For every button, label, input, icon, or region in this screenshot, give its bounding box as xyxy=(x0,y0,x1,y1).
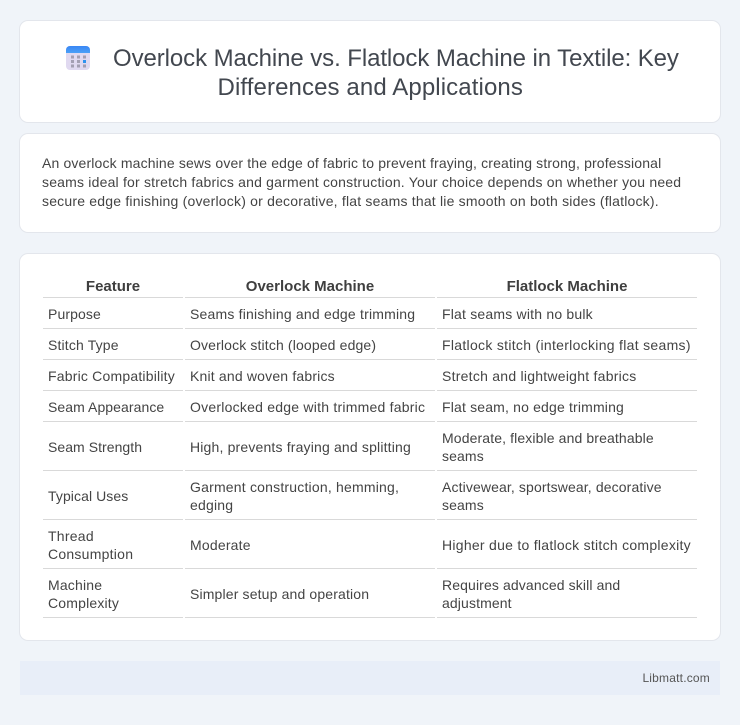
footer text: Libmatt.com xyxy=(642,671,710,685)
comparison table: Seam Strength xyxy=(48,439,142,455)
intro card xyxy=(20,134,720,232)
comparison table: Knit and woven fabrics xyxy=(190,368,335,384)
table card xyxy=(20,254,720,640)
comparison table: Consumption xyxy=(48,546,133,562)
comparison table: seams xyxy=(442,497,484,513)
comparison table: Flat seams with no bulk xyxy=(442,306,593,322)
footer bar xyxy=(20,661,720,695)
title xyxy=(113,45,679,101)
comparison table: Stitch Type xyxy=(48,337,119,353)
title: Differences and Applications xyxy=(218,74,523,101)
comparison table: Activewear, sportswear, decorative xyxy=(442,479,662,495)
comparison table: Simpler setup and operation xyxy=(190,586,369,602)
icon: calendar xyxy=(66,46,90,70)
comparison table: Fabric Compatibility xyxy=(48,368,175,384)
intro text: An overlock machine sews over the edge of fabric to prevent fraying, creating strong, professional xyxy=(42,155,661,171)
comparison table: Higher due to flatlock stitch complexity xyxy=(442,537,691,553)
comparison table: Overlocked edge with trimmed fabric xyxy=(190,399,425,415)
column headers: Overlock Machine xyxy=(246,278,374,295)
comparison table: Machine xyxy=(48,577,102,593)
comparison table: Moderate, flexible and breathable xyxy=(442,430,654,446)
column headers: Feature xyxy=(86,278,140,295)
comparison table xyxy=(43,278,697,618)
comparison table: Flatlock stitch (interlocking flat seams) xyxy=(442,337,691,353)
title card xyxy=(20,21,720,122)
comparison table: Requires advanced skill and xyxy=(442,577,620,593)
intro text: secure edge finishing (overlock) or decorative, flat seams that lie smooth on both sides (flatlock). xyxy=(42,193,659,209)
comparison table: Seams finishing and edge trimming xyxy=(190,306,415,322)
comparison table: Moderate xyxy=(190,537,251,553)
comparison table: Stretch and lightweight fabrics xyxy=(442,368,637,384)
comparison table: seams xyxy=(442,448,484,464)
comparison table: Seam Appearance xyxy=(48,399,164,415)
comparison table: Thread xyxy=(48,528,94,544)
comparison table: Typical Uses xyxy=(48,488,128,504)
comparison table: Complexity xyxy=(48,595,119,611)
comparison table: edging xyxy=(190,497,233,513)
comparison table: Flat seam, no edge trimming xyxy=(442,399,624,415)
comparison table: Overlock stitch (looped edge) xyxy=(190,337,376,353)
comparison table: High, prevents fraying and splitting xyxy=(190,439,411,455)
column headers: Flatlock Machine xyxy=(507,278,627,295)
comparison table: Garment construction, hemming, xyxy=(190,479,399,495)
intro text: seams ideal for stretch fabrics and garment construction. Your choice depends on whether you need xyxy=(42,174,681,190)
comparison table: Purpose xyxy=(48,306,101,322)
intro text xyxy=(42,155,681,209)
title: Overlock Machine vs. Flatlock Machine in Textile: Key xyxy=(113,45,679,72)
comparison table: adjustment xyxy=(442,595,512,611)
column headers xyxy=(86,278,627,295)
